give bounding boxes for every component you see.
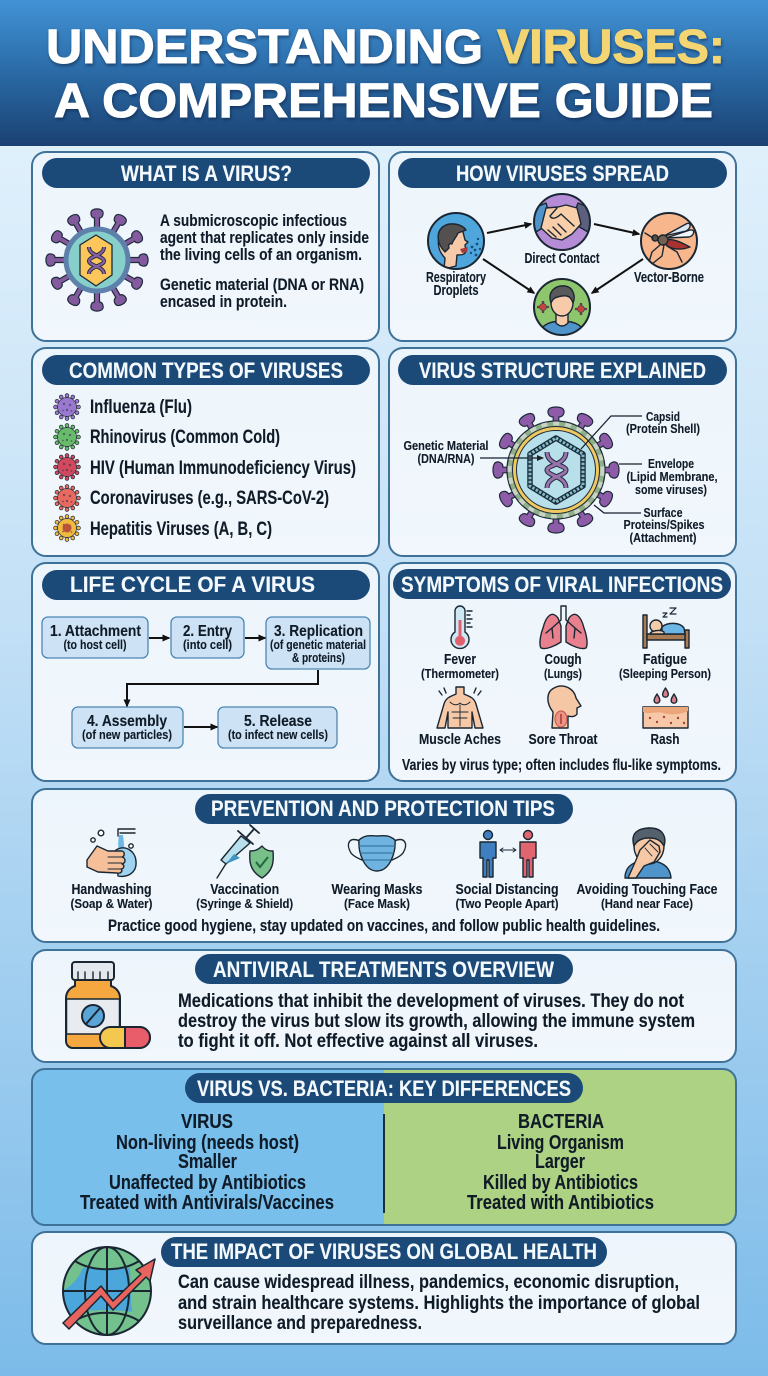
panel: virus vs bacteria: VIRUS VS. BACTERIA: KEY DIFFERENCES <box>197 1076 571 1101</box>
text: antiviral description <box>178 990 695 1052</box>
icon: virus with DNA <box>46 209 148 311</box>
column: bacteria: BACTERIA <box>518 1111 604 1133</box>
label: vaccination <box>196 882 293 911</box>
icon: infected person <box>534 279 590 340</box>
icon: mosquito <box>641 213 697 269</box>
icon: muscle aches <box>437 687 483 728</box>
icon: sleeping person <box>643 608 689 648</box>
symptom label: fever <box>421 652 499 681</box>
panel: impact on global health <box>32 1232 736 1344</box>
panel: life cycle of a virus: LIFE CYCLE OF A VIRUS <box>70 572 315 597</box>
label: wearing masks <box>332 882 422 911</box>
step 3: replication <box>266 617 370 669</box>
column: bacteria: Larger <box>535 1151 585 1173</box>
step 3: replication: & proteins) <box>292 650 345 665</box>
label: handwashing: Handwashing <box>72 882 152 898</box>
panel: common types of viruses: COMMON TYPES OF VIRUSES <box>69 358 343 383</box>
callout: surface proteins: (Attachment) <box>630 530 696 545</box>
text: global health impact: Can cause widespread illness, pandemics, economic disruption, <box>178 1271 679 1293</box>
list item: coronaviruses: Coronaviruses (e.g., SARS-CoV-2) <box>90 488 329 509</box>
symptom label: cough <box>544 652 582 681</box>
icon: handshake <box>530 194 595 250</box>
icon: medicine bottle and pill <box>66 962 150 1048</box>
labels: transmission routes: Respiratory <box>426 270 486 286</box>
column: virus <box>80 1111 334 1214</box>
list item: rhinovirus <box>54 424 280 450</box>
panel: virus structure explained: VIRUS STRUCTURE EXPLAINED <box>419 358 706 383</box>
icon: lungs <box>540 606 587 649</box>
callout: envelope: some viruses) <box>635 482 707 497</box>
panel: life cycle of a virus <box>32 563 379 781</box>
text: virus definition <box>160 211 369 311</box>
symptom label: sore throat: Sore Throat <box>528 732 598 748</box>
arrows: life cycle flow <box>127 638 318 727</box>
panel: symptoms of viral infections <box>389 563 736 781</box>
symptom label: rash: Rash <box>650 732 680 748</box>
callout: capsid <box>581 409 700 449</box>
label: handwashing <box>70 882 152 911</box>
symptom label: fatigue <box>619 652 711 681</box>
labels: transmission routes: Droplets <box>434 283 478 299</box>
callout: envelope: (Lipid Membrane, <box>626 469 718 484</box>
list item: hepatitis <box>54 515 272 541</box>
column: bacteria: Treated with Antibiotics <box>467 1192 654 1214</box>
callout: envelope <box>619 456 718 497</box>
step 1: attachment: (to host cell) <box>64 637 126 652</box>
callout: genetic material: Genetic Material <box>404 438 488 453</box>
callout: capsid: Capsid <box>646 409 680 424</box>
panel: virus vs bacteria <box>32 1069 736 1225</box>
title banner <box>0 0 768 146</box>
symptom label: fever: (Thermometer) <box>421 666 499 681</box>
step 4: assembly <box>72 707 183 748</box>
panel: prevention and protection tips: PREVENTION AND PROTECTION TIPS <box>211 796 555 821</box>
symptom label: fatigue: Fatigue <box>643 652 687 668</box>
note: prevention advice: Practice good hygiene, stay updated on vaccines, and follow public health guidelines. <box>108 917 660 935</box>
step 2: entry: (into cell) <box>183 637 232 652</box>
label: vaccination: Vaccination <box>210 882 279 898</box>
icon: respiratory droplets <box>428 213 484 269</box>
column: virus: Non-living (needs host) <box>116 1132 299 1154</box>
label: social distancing: (Two People Apart) <box>456 896 558 911</box>
callout: genetic material <box>404 438 543 466</box>
step 5: release: 5. Release <box>244 713 312 730</box>
label: vaccination: (Syringe & Shield) <box>196 896 293 911</box>
label: avoiding touching face: (Hand near Face) <box>601 896 693 911</box>
step 4: assembly: (of new particles) <box>82 727 172 742</box>
step 2: entry: 2. Entry <box>183 623 232 640</box>
label: wearing masks: (Face Mask) <box>344 896 410 911</box>
label: avoiding touching face: Avoiding Touching Face <box>576 882 718 898</box>
text: virus definition: agent that replicates only inside <box>160 228 369 247</box>
labels: transmission routes: Vector-Borne <box>634 270 704 286</box>
column: bacteria: Killed by Antibiotics <box>483 1172 638 1194</box>
symptom label: fever: Fever <box>444 652 476 668</box>
step 5: release: (to infect new cells) <box>228 727 328 742</box>
list item: HIV: HIV (Human Immunodeficiency Virus) <box>90 458 356 479</box>
column: virus: Treated with Antivirals/Vaccines <box>80 1192 334 1214</box>
label: wearing masks: Wearing Masks <box>332 882 422 898</box>
icon: vaccination <box>217 825 273 878</box>
text: global health impact: surveillance and preparedness. <box>178 1312 422 1334</box>
title banner: UNDERSTANDING <box>46 21 483 74</box>
labels: transmission routes: Direct Contact <box>524 251 600 267</box>
diagram: virus cross-section <box>493 407 619 533</box>
icon: face mask <box>348 836 406 871</box>
callout: envelope: Envelope <box>648 456 694 471</box>
arrows: transmission paths <box>483 224 643 293</box>
panel: symptoms of viral infections: SYMPTOMS OF VIRAL INFECTIONS <box>401 572 723 597</box>
icon: handwashing <box>87 829 136 876</box>
panel: what is a virus: WHAT IS A VIRUS? <box>121 161 292 186</box>
column: virus: Unaffected by Antibiotics <box>109 1172 306 1194</box>
labels: transmission routes <box>426 251 704 299</box>
list item: rhinovirus: Rhinovirus (Common Cold) <box>90 427 280 448</box>
panel: prevention and protection tips <box>32 789 736 942</box>
panel: how viruses spread: HOW VIRUSES SPREAD <box>456 161 669 186</box>
column: bacteria: Living Organism <box>497 1132 624 1154</box>
symptom label: cough: (Lungs) <box>544 666 582 681</box>
text: virus definition: Genetic material (DNA or RNA) <box>160 275 364 294</box>
panel: virus structure explained <box>389 348 736 556</box>
step 2: entry <box>171 617 244 658</box>
symptom label: fatigue: (Sleeping Person) <box>619 666 711 681</box>
step 3: replication: 3. Replication <box>274 623 363 640</box>
label: social distancing: Social Distancing <box>456 882 558 898</box>
title banner: A COMPREHENSIVE GUIDE <box>54 75 713 128</box>
list item: coronaviruses <box>54 485 329 511</box>
list item: hepatitis: Hepatitis Viruses (A, B, C) <box>90 519 272 540</box>
icon: two people apart <box>480 830 536 877</box>
panel: how viruses spread <box>389 152 736 341</box>
text: antiviral description: to fight it off. Not effective against all viruses. <box>178 1030 538 1052</box>
label: social distancing <box>456 882 558 911</box>
column: virus: Smaller <box>178 1151 237 1173</box>
icon: sore throat <box>548 686 581 728</box>
icon: globe with rising arrow <box>62 1247 155 1335</box>
panel: common types of viruses <box>32 348 379 556</box>
list item: influenza <box>54 394 192 420</box>
text: virus definition: encased in protein. <box>160 292 287 311</box>
step 4: assembly: 4. Assembly <box>87 713 167 730</box>
icon: hand near face <box>625 828 671 878</box>
list item: HIV <box>54 454 356 480</box>
label: handwashing: (Soap & Water) <box>70 896 152 911</box>
step 1: attachment <box>42 617 148 658</box>
text: global health impact <box>178 1271 700 1334</box>
step 1: attachment: 1. Attachment <box>50 623 142 640</box>
callout: surface proteins: Surface <box>644 505 682 520</box>
title banner: VIRUSES: <box>497 21 725 74</box>
column: virus: VIRUS <box>181 1111 233 1133</box>
text: antiviral description: Medications that inhibit the development of viruses. They do not <box>178 990 684 1012</box>
label: avoiding touching face <box>576 882 718 911</box>
callout: surface proteins <box>594 505 704 545</box>
icon: thermometer <box>451 606 472 648</box>
panel: what is a virus <box>32 152 379 341</box>
step 5: release <box>218 707 337 748</box>
symptom label: cough: Cough <box>544 652 582 668</box>
callout: surface proteins: Proteins/Spikes <box>624 517 704 532</box>
symptom label: muscle aches: Muscle Aches <box>419 732 501 748</box>
step 3: replication: (of genetic material <box>270 637 366 652</box>
panel: impact on global health: THE IMPACT OF VIRUSES ON GLOBAL HEALTH <box>171 1239 597 1264</box>
text: virus definition: the living cells of an organism. <box>160 245 362 264</box>
icon: rash <box>643 688 688 728</box>
panel: antiviral treatments overview: ANTIVIRAL TREATMENTS OVERVIEW <box>213 957 554 982</box>
callout: capsid: (Protein Shell) <box>626 421 700 436</box>
text: virus definition: A submicroscopic infectious <box>160 211 347 230</box>
list item: influenza: Influenza (Flu) <box>90 397 192 418</box>
column: bacteria <box>467 1111 654 1214</box>
callout: genetic material: (DNA/RNA) <box>418 451 474 466</box>
panel: antiviral treatments overview <box>32 950 736 1062</box>
